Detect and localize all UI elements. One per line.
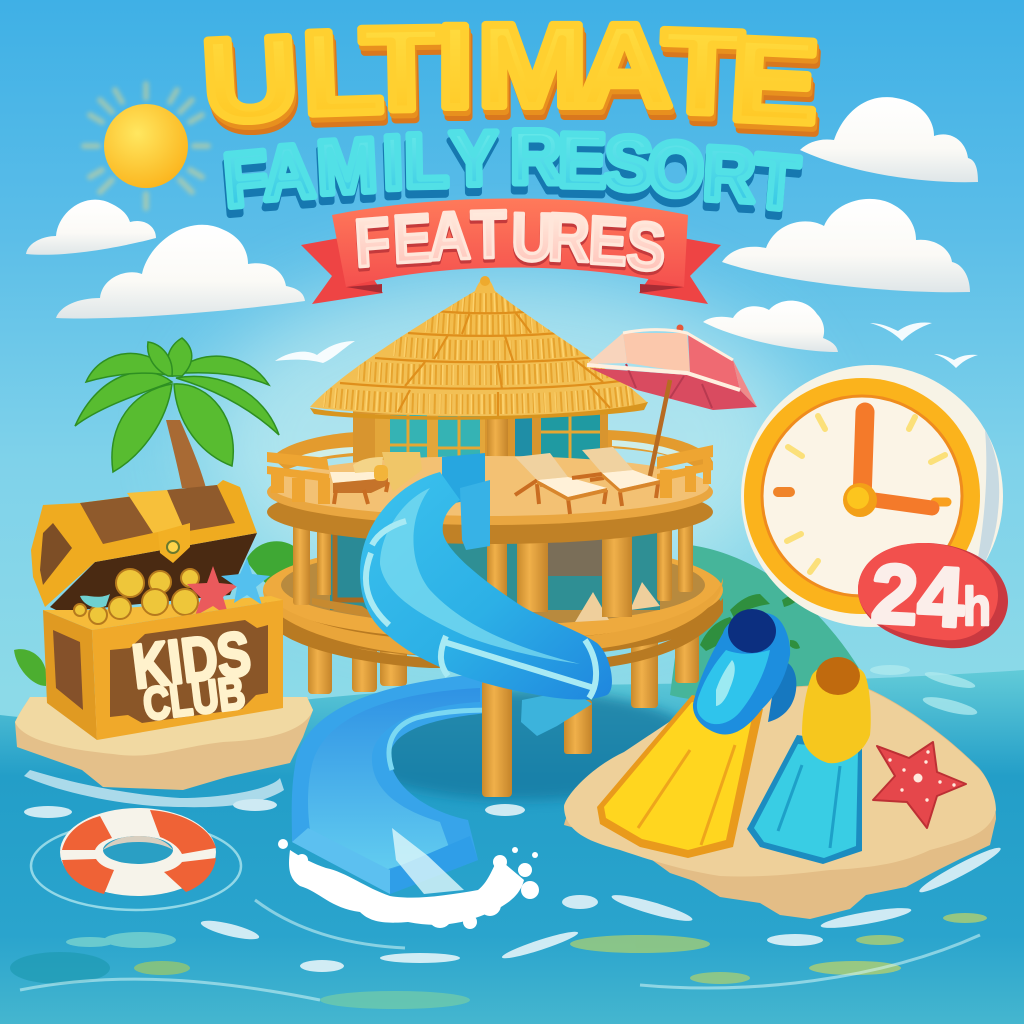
KIDS text: KIDS [129,619,254,702]
FEATURES text: FEATURES [352,200,668,289]
title: ULTIMATE: ULTIMATE [200,5,824,154]
FEATURES text: FEATURES [352,197,668,286]
walls [353,410,608,510]
ocean [0,545,1024,1024]
cloud: large left [56,225,305,319]
ribbon tails [301,237,383,304]
left sand island [15,697,313,790]
life ring [31,808,241,910]
leaves beside chest [14,649,46,686]
lid [31,480,257,607]
blue and yellow fin [597,609,796,858]
green hill [670,545,862,702]
sofa [330,452,422,504]
starfish red [187,566,239,617]
ribbon banner: FEATURES [301,197,721,304]
starfish blue [221,558,270,605]
top panels [442,453,485,503]
cloud: small left [26,200,156,255]
cloud: middle right [722,199,970,292]
straw texture [324,301,634,416]
wooden sign [110,620,268,723]
right sand island [564,683,996,919]
underside [590,368,757,410]
water slide [292,453,612,894]
title: FAMILY RESORT: FAMILY RESORT [220,114,802,226]
bird far right [934,354,978,368]
chest side [43,610,97,740]
beach umbrella [587,324,757,476]
upper stilts [293,520,693,617]
teal blade [747,735,862,864]
back railing [272,430,713,470]
heel strap [768,660,796,722]
splash foam [278,839,539,929]
outlet [521,690,592,736]
bird left [275,341,355,363]
upper tube [360,472,612,699]
slide water [392,828,464,894]
panels [623,333,690,373]
clock backing [741,365,1003,627]
treasure chest: kids club [31,480,283,740]
starfish on island [873,742,966,828]
cloud: small right [703,301,838,352]
lower stilts [308,615,699,708]
sky glow [200,270,800,610]
pole [650,380,670,476]
lower slide [292,672,500,894]
chest front [92,600,283,740]
chest rim [43,596,283,630]
cloud: top right [800,97,978,182]
lower deck and stilts [246,520,723,708]
treasure [74,569,199,624]
hasp [158,523,190,563]
chest interior [50,533,257,612]
lower platform front rim [263,578,723,656]
lower platform [263,558,723,658]
leaves left of deck [246,541,296,602]
yellow blade [597,695,763,858]
24h badge [858,543,1008,648]
front rails [267,445,713,504]
blue foot pocket [693,612,790,734]
24h badge: 24 [869,546,967,645]
title: ULTIMATE: ULTIMATE [199,0,822,149]
ribbon body [332,198,688,287]
upper deck with hut [267,410,713,544]
clock ring and face [744,378,980,614]
clock hands [862,412,865,500]
deck [267,480,713,544]
24-hour clock [741,365,1008,648]
lower room [330,530,660,610]
title: ULTIMATE: ULTIMATE [202,10,826,159]
yellow foot pocket [802,664,871,763]
palm tree [75,338,279,488]
teal and yellow fin [747,657,871,864]
title: FAMILY RESORT: FAMILY RESORT [219,122,801,234]
lounger left [515,453,607,514]
bird top right [870,322,932,341]
sun [84,84,208,208]
lounger right [572,447,660,506]
24h badge: h [963,577,991,637]
thatched roof [310,276,648,420]
centre stilt [482,680,512,797]
CLUB text: CLUB [140,666,248,730]
leaves behind fins [700,594,802,651]
clock ticks [787,416,945,572]
